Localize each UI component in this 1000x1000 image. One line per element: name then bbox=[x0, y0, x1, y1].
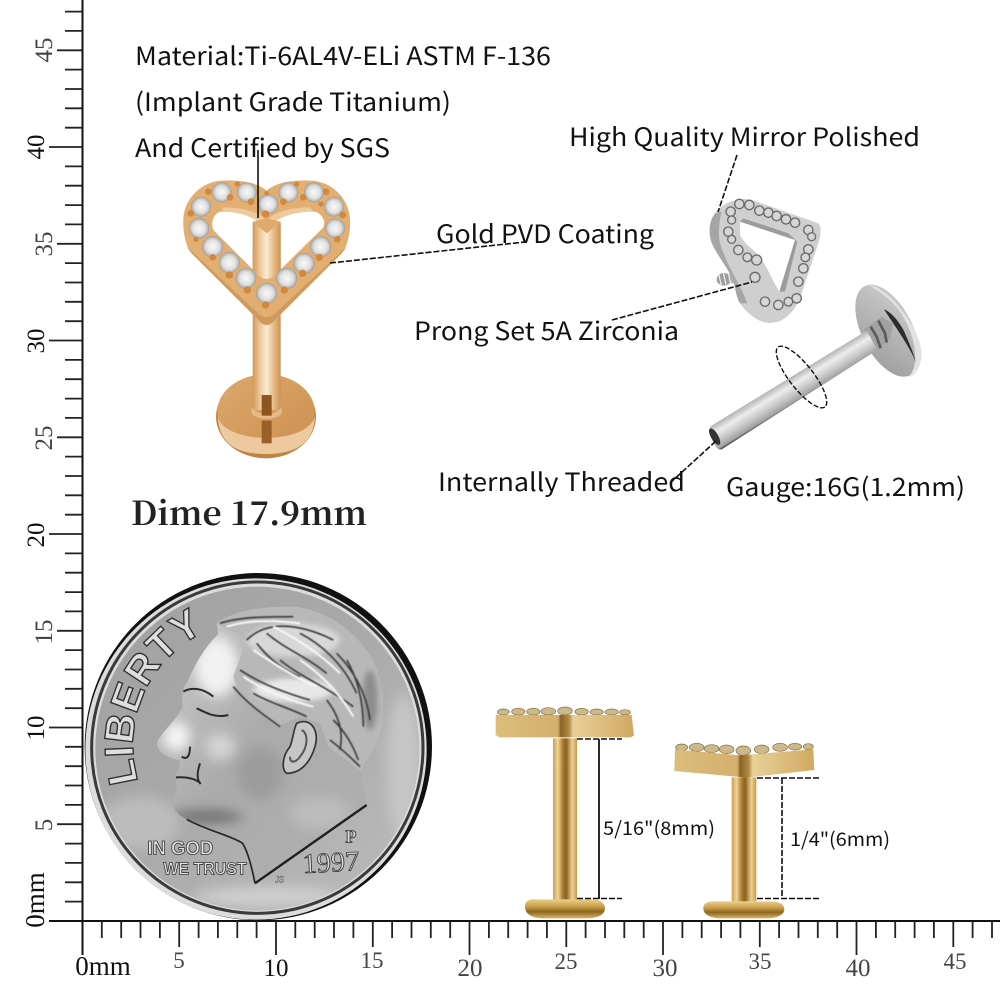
material heading text bbox=[135, 37, 551, 165]
gem row bbox=[676, 743, 813, 755]
gem prongs bbox=[187, 181, 346, 309]
gold base disc bbox=[216, 374, 316, 458]
year and mint mark: 1997 bbox=[302, 846, 360, 880]
material heading text: And Certified by SGS bbox=[135, 129, 390, 165]
field shading bbox=[100, 693, 420, 907]
IN GOD WE TRUST inscription: WE TRUST bbox=[163, 859, 247, 879]
year and mint mark bbox=[275, 826, 360, 886]
centre bevel of heart bbox=[253, 218, 281, 233]
LIBERTY inscription: LIBERTY bbox=[104, 606, 196, 786]
side view, 6mm post bbox=[674, 743, 814, 918]
ear bbox=[283, 722, 316, 773]
gauge dashed ring bbox=[769, 340, 834, 414]
dimension 5/16 in: 5/16"(8mm) bbox=[603, 814, 715, 841]
shaft through heart opening bbox=[253, 222, 281, 279]
material heading text: Material:Ti-6AL4V-ELi ASTM F-136 bbox=[135, 37, 551, 73]
ruler: vertical axis numbers bbox=[20, 38, 58, 928]
ruler: horizontal axis numbers: 0mm bbox=[75, 951, 131, 981]
threaded post bbox=[717, 268, 747, 286]
silver heart top, angled bbox=[707, 199, 933, 450]
silver heart frame bbox=[710, 199, 821, 323]
callout labels: Internally Threaded bbox=[438, 463, 685, 499]
silver bar threaded end bbox=[707, 427, 723, 447]
ruler: horizontal axis numbers: 35 bbox=[748, 949, 772, 974]
material heading text: (Implant Grade Titanium) bbox=[135, 83, 451, 119]
ruler: horizontal axis numbers: 40 bbox=[846, 955, 870, 982]
coin rim bbox=[85, 573, 432, 920]
chin shadow line bbox=[187, 819, 255, 883]
gold heart frame bbox=[183, 181, 350, 325]
jaw and neck dark edge bbox=[255, 805, 367, 883]
top plate bbox=[674, 749, 814, 778]
ruler: vertical axis numbers: 10 bbox=[23, 716, 50, 740]
callout labels bbox=[414, 118, 965, 504]
disc back of silver stud bbox=[842, 275, 933, 387]
ruler: vertical axis numbers: 35 bbox=[31, 232, 58, 256]
ruler: vertical axis numbers: 20 bbox=[23, 522, 50, 548]
silver bar bbox=[710, 331, 877, 450]
dimension 5/16 in bbox=[577, 739, 715, 899]
gold shaft bbox=[252, 225, 282, 443]
collar of silver bar bbox=[863, 317, 893, 350]
silver inner wall bbox=[740, 218, 797, 292]
ruler: vertical axis numbers: 45 bbox=[31, 38, 58, 62]
gem row bbox=[497, 707, 630, 715]
dime coin bbox=[84, 573, 432, 920]
callout labels: Prong Set 5A Zirconia bbox=[414, 312, 679, 348]
ruler: horizontal axis numbers: 5 bbox=[173, 948, 185, 973]
callout labels: Gold PVD Coating bbox=[436, 215, 654, 251]
callout lines bbox=[258, 150, 752, 483]
top plate bbox=[496, 715, 634, 737]
ruler: horizontal axis numbers: 15 bbox=[360, 948, 384, 973]
ruler: horizontal axis numbers: 25 bbox=[554, 949, 578, 974]
IN GOD WE TRUST inscription: IN GOD bbox=[147, 838, 213, 859]
shaft bbox=[732, 777, 756, 901]
ruler: horizontal axis numbers: 10 bbox=[264, 955, 288, 982]
year and mint mark: P bbox=[345, 826, 356, 846]
ruler: horizontal axis numbers: 20 bbox=[458, 955, 482, 982]
flat base bbox=[525, 899, 605, 918]
ruler: vertical axis numbers: 40 bbox=[23, 134, 50, 160]
ruler: vertical axis numbers: 30 bbox=[23, 328, 50, 354]
ruler: horizontal axis numbers: 30 bbox=[652, 955, 678, 982]
side view, 8mm post bbox=[496, 707, 634, 918]
ruler: vertical axis numbers: 15 bbox=[31, 620, 58, 644]
ruler: horizontal axis numbers bbox=[75, 948, 966, 982]
hair strands bbox=[220, 617, 370, 767]
ruler: vertical axis numbers: 25 bbox=[31, 426, 58, 450]
portrait features bbox=[176, 689, 228, 784]
shaft bbox=[553, 738, 577, 901]
ruler: horizontal axis numbers: 45 bbox=[944, 949, 966, 974]
silver heart gems bbox=[724, 199, 816, 310]
heart lower bevel bbox=[187, 247, 347, 325]
dimension 1/4 in: 1/4"(6mm) bbox=[790, 825, 890, 852]
heart inner highlight bbox=[222, 207, 313, 228]
gold heart labret bbox=[183, 181, 350, 458]
hair mass bbox=[217, 607, 383, 772]
callout labels: High Quality Mirror Polished bbox=[569, 118, 920, 154]
year and mint mark: JS bbox=[275, 876, 284, 886]
zirconia gems bbox=[189, 183, 345, 304]
dime label: Dime 17.9mm bbox=[131, 488, 367, 535]
IN GOD WE TRUST inscription bbox=[147, 838, 247, 879]
ruler: vertical axis numbers: 0mm bbox=[20, 872, 50, 928]
FDR portrait bbox=[157, 607, 383, 883]
portrait shading bbox=[163, 607, 383, 830]
dimension 1/4 in bbox=[757, 778, 890, 899]
silver left wall bbox=[710, 212, 747, 303]
flat base bbox=[703, 901, 784, 918]
ruler: vertical axis numbers: 5 bbox=[31, 819, 58, 831]
callout labels: Gauge:16G(1.2mm) bbox=[726, 468, 965, 504]
